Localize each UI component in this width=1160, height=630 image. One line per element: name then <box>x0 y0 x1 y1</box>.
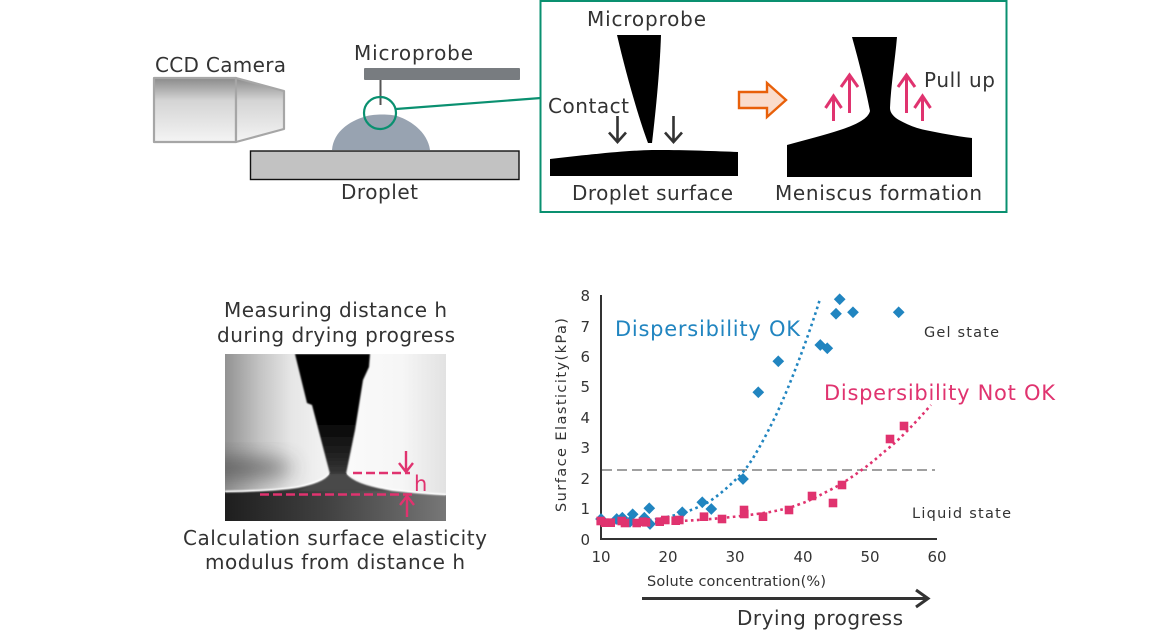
microprobe tip <box>617 35 661 143</box>
CCD camera label: CCD Camera <box>155 53 286 77</box>
blue data points <box>596 294 904 529</box>
pull up arrows <box>826 75 930 121</box>
calculation caption: Calculation surface elasticity <box>183 526 487 550</box>
calculation caption <box>183 526 487 574</box>
drying progress label: Drying progress <box>737 606 903 630</box>
microprobe holder and needle <box>364 68 520 105</box>
x axis ticks: 20 <box>658 548 678 566</box>
x axis title: Solute concentration(%) <box>647 574 826 590</box>
y axis ticks: 2 <box>580 470 590 488</box>
pink trend line <box>601 405 931 523</box>
y axis ticks: 3 <box>580 439 590 457</box>
infographic canvas <box>152 0 1056 630</box>
drying progress arrow <box>642 590 928 607</box>
y axis ticks: 8 <box>580 287 590 305</box>
x axis ticks: 50 <box>860 548 880 566</box>
distance h markup <box>260 451 427 517</box>
y axis ticks: 6 <box>580 348 590 366</box>
zoom callout circle and leader <box>364 97 541 129</box>
y axis ticks: 7 <box>580 318 590 336</box>
threshold dashed line <box>602 469 935 471</box>
droplet surface shape <box>550 150 738 176</box>
measuring heading <box>217 298 455 347</box>
droplet surface label: Droplet surface <box>572 181 733 205</box>
pull up label: Pull up <box>924 68 995 92</box>
axes <box>601 295 937 539</box>
calculation caption: modulus from distance h <box>205 550 465 574</box>
y axis ticks: 0 <box>580 531 590 549</box>
panel: contact and meniscus detail <box>540 1 1006 212</box>
contact label: Contact <box>548 94 629 118</box>
chart: surface elasticity vs solute concentration <box>554 287 1056 630</box>
photo: probe meniscus side view <box>225 354 446 521</box>
gel state label: Gel state <box>924 325 999 341</box>
liquid state label: Liquid state <box>912 506 1011 522</box>
panel microprobe label: Microprobe <box>587 7 706 31</box>
x axis ticks: 30 <box>725 548 745 566</box>
y axis title: Surface Elasticity(kPa) <box>554 318 570 512</box>
y axis ticks: 4 <box>580 409 590 427</box>
x axis ticks: 60 <box>927 548 947 566</box>
icon: CCD camera <box>154 78 284 142</box>
droplet <box>332 114 430 150</box>
meniscus label: Meniscus formation <box>775 181 982 205</box>
x axis ticks: 10 <box>591 548 611 566</box>
contact arrows <box>609 116 682 142</box>
orange transition arrow <box>739 83 786 117</box>
blue trend line <box>601 299 820 522</box>
microprobe label: Microprobe <box>354 41 473 65</box>
pink data points <box>597 422 908 527</box>
meniscus shape <box>787 37 972 177</box>
measuring heading: Measuring distance h <box>224 298 447 322</box>
y axis ticks <box>580 287 590 549</box>
y axis ticks: 5 <box>580 378 590 396</box>
x axis ticks: 40 <box>793 548 813 566</box>
measuring heading: during drying progress <box>217 323 455 347</box>
dispersibility not OK label: Dispersibility Not OK <box>824 381 1056 405</box>
h label: h <box>414 472 427 496</box>
y axis ticks: 1 <box>580 500 590 518</box>
substrate plate <box>250 151 519 180</box>
droplet label: Droplet <box>341 180 418 204</box>
dispersibility OK label: Dispersibility OK <box>615 317 801 341</box>
x axis ticks <box>591 548 947 566</box>
